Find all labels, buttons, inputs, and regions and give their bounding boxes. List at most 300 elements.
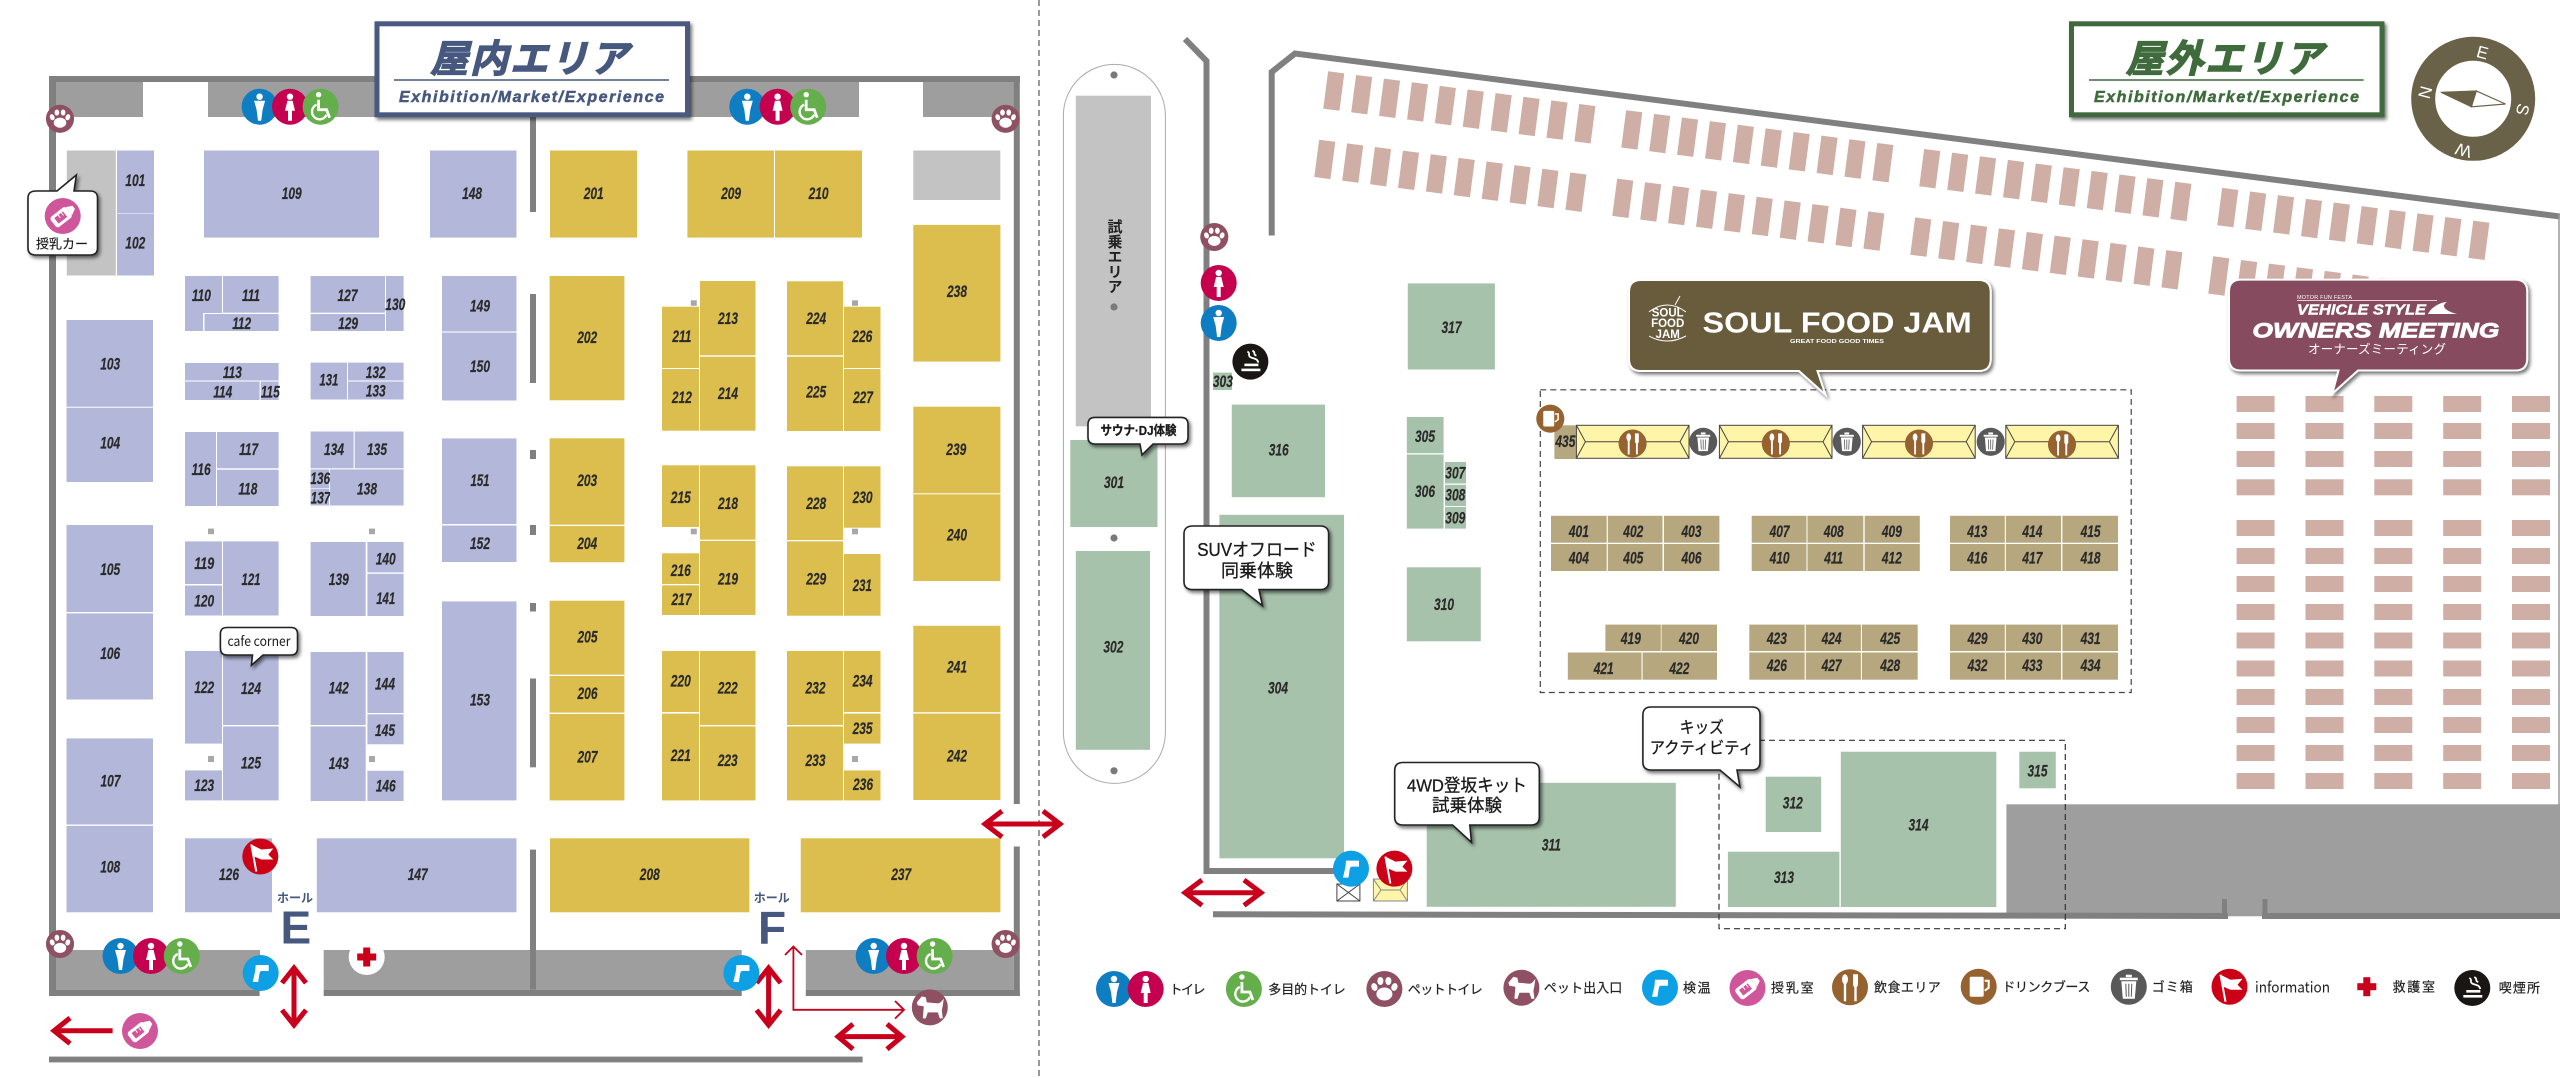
indoor walls and service blocks [49, 76, 1020, 1062]
booth 211: 211 [672, 327, 691, 346]
booth 104: 104 [100, 434, 121, 453]
booth 237: 237 [890, 865, 912, 884]
booth 123 [185, 770, 222, 800]
legend: nursing room [1730, 970, 1814, 1006]
owners meeting heading: OWNERS MEETING [2252, 320, 2499, 342]
booth 223: 223 [717, 751, 738, 770]
booth 111: 111 [242, 286, 260, 305]
booth 432 [1950, 652, 2005, 680]
booth 233 [787, 726, 843, 800]
booth 416 [1950, 544, 2005, 571]
booth 111 [223, 276, 279, 313]
callout: sauna DJ experience: サウナ·DJ体験 [1100, 423, 1176, 438]
booth 217 [662, 585, 699, 615]
booth 413: 413 [1967, 522, 1988, 541]
arrow: outdoor entrance [1185, 880, 1261, 905]
booth 152: 152 [470, 534, 490, 553]
booth 228: 228 [805, 494, 827, 513]
booth 231: 231 [852, 576, 872, 595]
booth 312 [1766, 777, 1821, 832]
legend: first aid [2357, 976, 2435, 996]
booth 313 [1728, 852, 1839, 907]
hall F label [754, 891, 790, 954]
booth 310: 310 [1434, 595, 1454, 614]
booth 226: 226 [852, 327, 873, 346]
booth 310 [1407, 567, 1481, 641]
icons: top left toilets [242, 89, 339, 125]
booth 118: 118 [238, 479, 258, 498]
booth 109 [204, 150, 379, 238]
booth 426: 426 [1766, 656, 1787, 675]
booth 212 [662, 369, 699, 431]
callout: kids activity [1643, 707, 1760, 787]
booth 112 [204, 314, 279, 333]
booth 225 [787, 357, 843, 431]
booth 418: 418 [2080, 549, 2101, 568]
legend: first aid: 救護室 [2392, 976, 2435, 996]
booth 129 [311, 314, 385, 333]
booth 230: 230 [852, 488, 873, 507]
booth 227: 227 [852, 388, 874, 407]
legend [1096, 969, 2540, 1007]
booth 434: 434 [2080, 656, 2101, 675]
booth 411: 411 [1823, 549, 1843, 568]
booth 217: 217 [671, 590, 693, 609]
booth 412 [1865, 544, 1920, 571]
logo: soul food jam stack: JAM [1656, 329, 1680, 341]
booth 103: 103 [100, 354, 121, 373]
booth 107 [66, 738, 153, 824]
booth 311: 311 [1542, 836, 1561, 855]
booth 435: 435 [1555, 432, 1576, 451]
booth 148 [430, 150, 516, 238]
booth 405 [1608, 544, 1662, 571]
booth 201: 201 [583, 184, 604, 203]
booth 138 [330, 469, 404, 506]
booth 315: 315 [2028, 762, 2048, 780]
booth 207 [550, 714, 624, 800]
logo: soul food jam stack [1649, 296, 1686, 341]
booth 417 [2006, 544, 2061, 571]
booth 402 [1608, 516, 1662, 543]
booth 148: 148 [462, 184, 482, 203]
booth 229: 229 [805, 570, 827, 588]
callout: SUV offroad: 同乗体験 [1221, 561, 1293, 581]
booth 153: 153 [470, 691, 490, 710]
booth 315 [2019, 752, 2056, 788]
legend: pet toilet [1366, 971, 1483, 1007]
booth 134: 134 [324, 440, 344, 459]
booth 203 [550, 438, 624, 525]
booth 221 [662, 714, 699, 800]
booth 406 [1664, 544, 1719, 571]
compass: W [2453, 139, 2474, 161]
booth 424 [1806, 625, 1861, 651]
booth 130 [385, 276, 406, 331]
booth 415 [2062, 516, 2118, 543]
booth 110 [185, 276, 222, 331]
legend: pet entrance: ペット出入口 [1544, 978, 1622, 996]
booth 418 [2062, 544, 2118, 571]
compass: E [2474, 42, 2490, 63]
booth 210 [775, 150, 862, 238]
outdoor walls [1185, 39, 2560, 916]
title: indoor area: Exhibition/Market/Experience [399, 89, 664, 106]
owners meeting parking grid [2237, 396, 2550, 789]
booth 419 [1605, 625, 1661, 651]
booth 426 [1749, 652, 1805, 680]
booth 234: 234 [852, 671, 873, 690]
booth 222 [700, 651, 756, 725]
booth 412: 412 [1881, 549, 1902, 568]
legend: pet toilet: ペットトイレ [1408, 979, 1483, 998]
title: indoor area [377, 24, 688, 115]
booth 314: 314 [1908, 816, 1929, 834]
legend: information [2212, 969, 2330, 1005]
booth 303: 303 [1213, 372, 1233, 391]
legend: multipurpose toilet: 多目的トイレ [1268, 979, 1346, 998]
legend: smoking [2454, 970, 2540, 1006]
booth 414 [2006, 516, 2061, 543]
booth 228 [787, 466, 843, 540]
icon: nursing room [122, 1013, 158, 1049]
booth 415: 415 [2080, 522, 2101, 541]
booth 145 [367, 714, 404, 744]
legend: nursing room: 授乳室 [1771, 978, 1814, 996]
booth 414: 414 [2022, 522, 2043, 541]
divider between indoor and outdoor areas [1038, 0, 1040, 1078]
booth 130: 130 [385, 295, 406, 314]
booth 301: 301 [1104, 473, 1124, 492]
booth 117 [217, 432, 279, 468]
booth 202: 202 [576, 328, 598, 347]
booth 425: 425 [1879, 629, 1901, 648]
booth 141: 141 [376, 589, 395, 608]
booth 406: 406 [1681, 549, 1702, 568]
parking lot block [2006, 804, 2560, 916]
booth 205 [550, 601, 624, 675]
booth 429: 429 [1967, 629, 1988, 648]
booth 110: 110 [192, 286, 211, 305]
booth 102 [117, 214, 154, 276]
booth 219 [700, 541, 756, 615]
booth 211 [662, 307, 699, 368]
booth 118 [217, 470, 279, 506]
owners meeting katakana: オーナーズミーティング [2308, 342, 2446, 356]
booth 316 [1232, 405, 1325, 497]
booth 427 [1806, 652, 1861, 680]
booth 241: 241 [946, 658, 967, 677]
booth 216: 216 [670, 561, 691, 580]
booth 108 [66, 826, 153, 912]
booth 136: 136 [310, 469, 331, 488]
booth 208: 208 [639, 865, 660, 884]
arrow: to nursing car [54, 1018, 113, 1044]
booth 202 [550, 276, 624, 400]
booth 411 [1808, 544, 1863, 571]
booth 213 [700, 281, 756, 355]
food zone dashed boundary [1540, 390, 2131, 692]
booth 435 [1554, 425, 1576, 459]
booth 238: 238 [946, 282, 967, 301]
icon: pet entrance [912, 989, 948, 1025]
booth 143 [311, 726, 366, 801]
booth 144: 144 [375, 674, 395, 694]
booth 425 [1862, 625, 1918, 651]
arrow: hall E entrance [282, 968, 306, 1025]
booth 308 [1445, 485, 1466, 506]
booth 433: 433 [2022, 656, 2043, 675]
hall E label: ホール [277, 891, 313, 905]
booth 114 [185, 382, 260, 401]
booth 313: 313 [1774, 868, 1794, 887]
booth 231 [844, 554, 880, 616]
booth 422: 422 [1669, 659, 1690, 678]
legend: eating area [1832, 969, 1941, 1005]
booth 215: 215 [670, 488, 691, 507]
parking rows along the fence [1314, 71, 2489, 328]
booth 241 [913, 626, 1000, 712]
booth 102: 102 [125, 234, 146, 253]
vehicle style wordmark: VEHICLE STYLE [2297, 302, 2427, 318]
booth 117: 117 [239, 440, 259, 459]
hall F label: ホール [754, 891, 790, 905]
arrow: indoor to outdoor [985, 811, 1060, 837]
booth 104 [66, 408, 153, 482]
icons: top right toilets [729, 89, 826, 125]
booth 225: 225 [805, 382, 827, 402]
booth 308: 308 [1445, 486, 1466, 505]
callout: nursing car: 授乳カー [36, 236, 88, 252]
booth 107: 107 [100, 772, 122, 791]
callout: kids activity: キッズ [1680, 718, 1724, 737]
booth 428 [1862, 652, 1918, 680]
food zone booths [1551, 425, 2118, 680]
booth 306 [1407, 454, 1444, 529]
outdoor icons: pet toilet, toilets, smoking [1200, 223, 1268, 380]
booth 423 [1749, 625, 1805, 651]
booth 120 [185, 586, 222, 616]
legend: trash: ゴミ箱 [2152, 976, 2193, 996]
icon: first aid [349, 939, 385, 975]
booth 312: 312 [1783, 794, 1803, 812]
booth 126: 126 [219, 865, 239, 884]
booth 309 [1445, 507, 1466, 529]
booth 131: 131 [319, 370, 338, 389]
title: outdoor area: Exhibition/Market/Experience [2094, 89, 2359, 106]
booth 405: 405 [1623, 549, 1644, 568]
legend: trash [2111, 969, 2193, 1005]
small pillars [208, 300, 858, 762]
booth 108: 108 [100, 858, 121, 877]
booth 112: 112 [232, 314, 252, 333]
booth 131 [311, 363, 347, 400]
outdoor area floor plan [1063, 24, 2560, 929]
booth 422 [1643, 652, 1717, 680]
booth 304 [1219, 515, 1344, 858]
booth 404 [1551, 544, 1607, 571]
booth 115 [261, 382, 280, 401]
booth 236 [844, 770, 880, 800]
icon: information hall E [242, 838, 278, 874]
booth 204 [550, 526, 624, 562]
booth 113: 113 [223, 363, 242, 382]
legend: drink booth: ドリンクブース [2002, 976, 2090, 996]
motor fun festa line: MOTOR FUN FESTA [2297, 295, 2352, 301]
booth 201 [550, 150, 637, 238]
booth 432: 432 [1967, 656, 1988, 675]
booth 403: 403 [1681, 522, 1702, 541]
booth 116: 116 [192, 460, 211, 479]
title: outdoor area: 屋外エリア [2126, 39, 2327, 81]
arrow: bottom corridor [838, 1024, 902, 1049]
booth 207: 207 [577, 748, 599, 766]
booth 427: 427 [1821, 656, 1843, 675]
booth 404: 404 [1568, 549, 1589, 568]
booth 147 [317, 838, 516, 912]
booth 121 [223, 541, 279, 616]
booth 305 [1407, 417, 1444, 453]
legend: pet entrance [1503, 970, 1622, 1006]
booth 134 [311, 432, 354, 468]
booth 139: 139 [329, 570, 349, 589]
booth 214: 214 [717, 384, 738, 403]
booth 152 [442, 526, 516, 562]
callout: sauna DJ experience [1088, 417, 1188, 455]
booth 125: 125 [241, 753, 261, 772]
icons: bottom left toilets [102, 938, 200, 974]
booth 105: 105 [100, 560, 121, 579]
booth 410: 410 [1769, 549, 1790, 568]
booth 232 [787, 651, 843, 725]
booth 307: 307 [1445, 464, 1466, 483]
booth 106: 106 [100, 644, 121, 663]
booth 220 [662, 651, 699, 712]
icon: pet toilet bottom left [46, 930, 74, 958]
hall F label: F [758, 902, 786, 954]
test ride track: 試乗エリア [1106, 219, 1122, 294]
booth 125 [223, 726, 279, 800]
booth 304: 304 [1268, 679, 1288, 698]
legend: multipurpose toilet [1226, 971, 1346, 1007]
booth 222: 222 [717, 679, 738, 698]
callout: cafe corner [220, 628, 298, 665]
legend: toilet [1096, 971, 1206, 1007]
booth 204: 204 [576, 534, 598, 553]
legend: toilet: トイレ [1170, 979, 1206, 998]
booth 221: 221 [670, 746, 691, 765]
booth 137: 137 [311, 489, 332, 508]
booth 416: 416 [1967, 549, 1988, 568]
booth 407 [1752, 516, 1806, 543]
booth 116 [185, 432, 216, 506]
legend: smoking: 喫煙所 [2499, 978, 2540, 996]
booth 235: 235 [852, 719, 873, 738]
booth 238 [913, 225, 1000, 362]
booth 133 [348, 381, 404, 400]
booth 101 [117, 150, 154, 213]
legend: drink booth [1961, 969, 2090, 1005]
callout: SUV offroad: SUVオフロード [1197, 540, 1317, 560]
logo: soul food jam stack: FOOD [1651, 318, 1684, 330]
booth 403 [1664, 516, 1719, 543]
booth 153 [442, 601, 516, 800]
booth 149: 149 [470, 297, 490, 316]
booth 237 [801, 838, 1000, 912]
booth 146: 146 [376, 776, 396, 795]
title: outdoor area [2072, 24, 2382, 115]
booth 239: 239 [946, 440, 967, 459]
callout: 4WD climbing kit: 4WD登坂キット [1407, 776, 1527, 796]
arrow: hall F entrance [757, 968, 781, 1025]
icon: pet toilet top right [992, 105, 1020, 133]
booth 124 [223, 651, 279, 725]
booth 417: 417 [2022, 549, 2043, 568]
booth 215 [662, 465, 699, 527]
booth 314 [1841, 752, 1996, 907]
booth 240 [913, 494, 1000, 581]
booth 429 [1950, 625, 2005, 651]
booth 420 [1662, 625, 1717, 651]
hall E label: E [280, 902, 311, 954]
booth 127 [311, 276, 385, 313]
booth 305: 305 [1415, 427, 1435, 446]
booth 214 [700, 357, 756, 431]
callout: owners meeting [2229, 280, 2527, 394]
legend: information: information [2255, 976, 2330, 998]
booth 132: 132 [366, 363, 386, 382]
booth 209: 209 [720, 184, 741, 203]
logo: soul food jam stack: SOUL [1652, 308, 1684, 320]
booth 126 [185, 838, 272, 912]
booth 138: 138 [357, 479, 377, 498]
booth 124: 124 [241, 679, 261, 698]
booth 219: 219 [717, 570, 738, 588]
booth 317: 317 [1442, 318, 1463, 337]
booth 206 [550, 676, 624, 713]
booth 431 [2062, 625, 2118, 651]
booth 317 [1408, 283, 1495, 370]
callout: SOUL FOOD JAM [1629, 280, 1991, 395]
booth 420: 420 [1678, 629, 1699, 648]
icon: thermometer hall F [723, 955, 759, 991]
booth 144 [367, 652, 404, 713]
booth 220: 220 [670, 671, 691, 690]
booth 106 [66, 613, 153, 700]
booth 115: 115 [261, 382, 280, 401]
booth 140: 140 [376, 550, 396, 568]
booth 234 [844, 651, 880, 712]
booth 233: 233 [805, 751, 826, 770]
test ride track [1063, 64, 1165, 783]
callout: 4WD climbing kit: 試乗体験 [1432, 796, 1502, 816]
icons: bottom right toilets [856, 938, 953, 974]
booth 150 [442, 333, 516, 400]
booth 205: 205 [577, 627, 598, 646]
booth 133: 133 [366, 381, 386, 400]
booth 103 [66, 320, 153, 407]
booth 101: 101 [125, 171, 145, 190]
booth 122: 122 [194, 678, 215, 697]
booth 409: 409 [1881, 522, 1902, 541]
booth 408 [1808, 516, 1863, 543]
hall F booths [550, 150, 1000, 912]
booth 209 [687, 150, 774, 238]
booth 311 [1427, 783, 1676, 907]
booth 408: 408 [1823, 522, 1844, 541]
booth 119: 119 [194, 554, 215, 573]
booth 428: 428 [1879, 656, 1901, 675]
